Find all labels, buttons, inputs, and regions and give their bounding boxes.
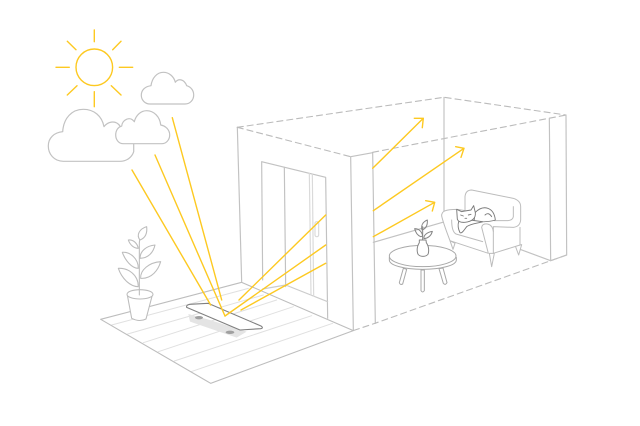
table xyxy=(389,245,456,292)
plant in pot xyxy=(118,227,161,321)
armchair xyxy=(442,190,522,267)
room walls xyxy=(373,97,567,261)
icon: sun xyxy=(56,30,133,107)
scale device xyxy=(187,303,262,338)
device body xyxy=(187,303,262,330)
floor xyxy=(101,282,353,383)
sliding door xyxy=(262,162,328,318)
vase with leaves xyxy=(415,220,432,256)
dashed roof and floor outline xyxy=(237,97,567,330)
cat xyxy=(457,206,495,233)
arrow: middle reflected ray xyxy=(373,147,464,211)
device shadow xyxy=(188,314,247,338)
arrow: lower reflected ray xyxy=(373,201,435,237)
wall with door xyxy=(237,127,375,330)
arrow: upper reflected ray xyxy=(373,118,423,168)
icon: small top cloud xyxy=(141,72,194,104)
icon: big cloud xyxy=(48,109,134,161)
sun rays incoming and reflected xyxy=(132,118,464,316)
icon: middle cloud xyxy=(116,111,170,144)
device feet xyxy=(195,316,234,334)
